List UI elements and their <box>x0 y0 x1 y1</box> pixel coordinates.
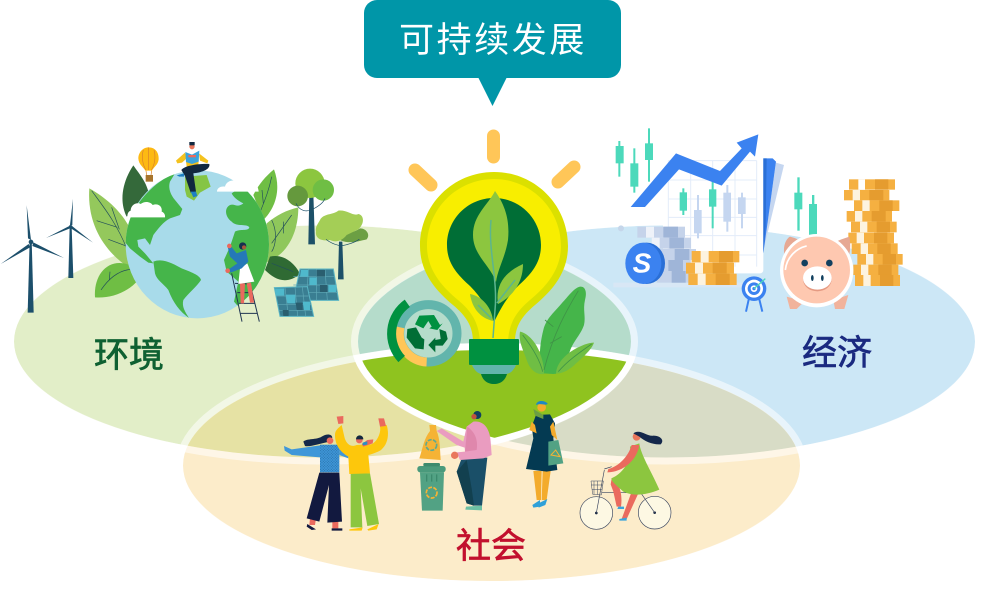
candles: chart <box>680 182 746 238</box>
icon: dollar coin: S <box>633 248 652 279</box>
label: society: 社会 <box>456 527 526 566</box>
callout: sustainable development: 可持续发展 <box>399 21 587 60</box>
centre overlap <box>362 350 626 438</box>
icon: recycling bag <box>419 425 441 460</box>
centre white outline <box>354 343 636 444</box>
figure: woman with tote bag <box>526 401 563 508</box>
gold coins: tall stack <box>844 179 903 286</box>
silver coin stack <box>613 225 753 287</box>
icon: solar panels <box>274 269 339 316</box>
icon: target <box>742 276 766 312</box>
candles: left <box>616 128 653 193</box>
label: environment: 环境 <box>94 336 164 375</box>
icon: piggy bank <box>780 234 853 309</box>
icon: bulb base <box>469 339 519 384</box>
icon: recycling arrows <box>407 315 448 352</box>
candles: right <box>794 177 817 242</box>
icon: wind turbine small <box>46 199 93 278</box>
icon: bulb dark core <box>447 198 541 322</box>
icon: tree one <box>287 169 334 244</box>
overlap: economy and society <box>509 363 796 458</box>
leaves behind globe <box>89 165 300 297</box>
icon: bulb glass <box>420 172 568 342</box>
illustration: couple cheering <box>284 416 388 531</box>
icon: tree two <box>316 211 368 279</box>
icon: bulb rays <box>415 136 574 185</box>
globe <box>123 170 272 318</box>
trend arrow <box>631 134 758 207</box>
figure: cyclist <box>580 432 671 529</box>
illustration: economy <box>613 128 903 312</box>
chart paper <box>663 153 763 273</box>
illustration: environment <box>1 147 368 316</box>
figure: reading man on globe <box>176 142 209 197</box>
icon: plant <box>520 287 594 374</box>
icon: recycling ring <box>392 303 457 362</box>
icon: globe with figures <box>123 142 272 322</box>
icon: clouds <box>127 174 259 217</box>
circle: economy <box>358 226 975 458</box>
ring segment yellow <box>399 327 427 362</box>
gold coins: middle stack <box>686 251 739 285</box>
figure: man in yellow jacket <box>335 416 388 531</box>
icon: bulb inner <box>427 179 561 342</box>
illustration: recycling and cycling people <box>417 401 671 529</box>
illustration: light bulb <box>415 136 594 384</box>
figure: woman on ladder <box>225 242 259 322</box>
icon: hot air balloon <box>138 147 159 182</box>
ring segment green <box>392 303 407 359</box>
overlap: environment and society <box>188 362 464 458</box>
icon: dollar coin <box>625 243 665 284</box>
figure: man in pink <box>437 411 492 510</box>
figure: woman in blue top <box>284 434 348 531</box>
label: economy: 经济 <box>802 334 872 373</box>
icon: recycling bin <box>417 463 446 511</box>
circle: society <box>183 350 800 581</box>
venn diagram <box>10 222 978 588</box>
callout: sustainable development <box>364 0 621 106</box>
circle: environment <box>14 226 631 458</box>
overlap: environment and economy <box>358 269 631 355</box>
icon: wind turbine large <box>1 205 64 313</box>
booklet <box>763 158 784 253</box>
icon: sprout <box>470 191 523 338</box>
